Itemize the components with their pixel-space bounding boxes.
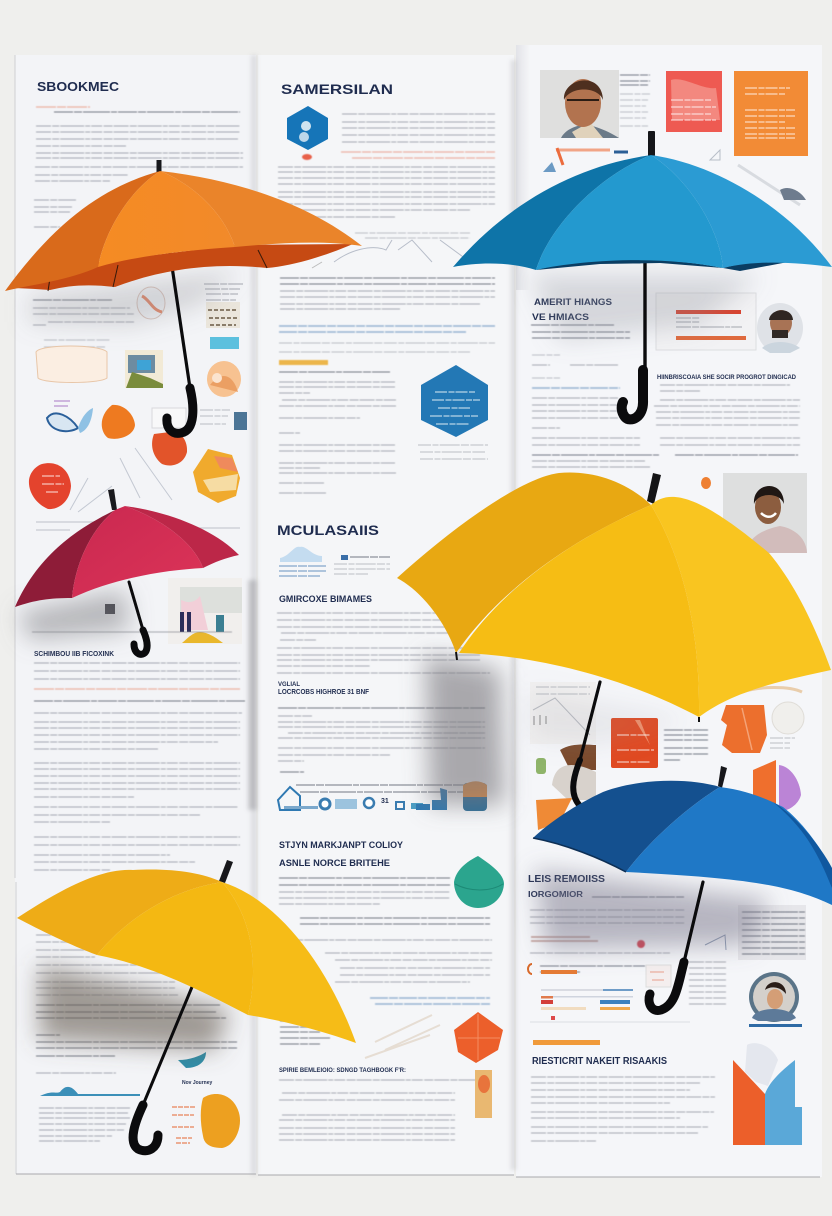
diagram: left callout box: [36, 346, 107, 382]
icon: peach circle: [207, 361, 241, 397]
icon: purple and blue device: [47, 401, 93, 433]
icon: large blue hexagon: [418, 365, 488, 459]
text block: bottom right: [531, 1077, 715, 1141]
heading: VGLIAL: VGLIAL: [278, 682, 300, 688]
heading: middle top: SAMERSILAN: [281, 82, 393, 97]
text block: side column: [689, 962, 726, 1004]
text block: beside portrait: [620, 75, 650, 126]
icon: orange sketch circle: [137, 287, 165, 319]
text block: right upper: [531, 325, 800, 467]
icon: red blob: [152, 432, 187, 466]
chart: horizontal bars: [528, 964, 690, 1022]
heading: AMERIT HIANGS: AMERIT HIANGS: [534, 297, 612, 308]
document: dark list: [738, 905, 806, 960]
blue shaft and hook: [622, 258, 645, 419]
portrait: smiling man: [723, 473, 807, 553]
blue ferrule: [648, 131, 655, 156]
text block: middle lower: [277, 613, 490, 772]
text block: left mid: [32, 632, 245, 870]
icon: yellow gem: [193, 449, 240, 503]
icon: small orange lock: [701, 477, 711, 489]
box: red bar card: [656, 293, 756, 350]
chart: pale blue graphic: [279, 547, 390, 576]
label bar: [533, 1040, 600, 1045]
heading: bottom right: RIESTICRIT NAKEIT RISAAKIS: [532, 1055, 667, 1067]
page seam shadows: [248, 55, 516, 1175]
lower blue shaft and hook: [649, 882, 703, 1011]
sketch: pale technical lines: [365, 1015, 440, 1058]
blue canopy: [453, 155, 832, 270]
umbrella: lower left yellow: [17, 860, 356, 1151]
heading: left top: SBOOKMEC: [37, 79, 120, 94]
card: orange: [734, 71, 808, 156]
sketch lines: [36, 448, 240, 530]
yellow canopy: [397, 472, 831, 717]
orange underside: [7, 244, 353, 290]
icon: orange dome: [201, 1094, 240, 1148]
text block: bottom middle: [279, 878, 492, 1140]
icon: orange blob: [102, 405, 135, 439]
icon: orange hexagon: [454, 1012, 503, 1063]
heading: VE HMIACS: VE HMIACS: [532, 312, 589, 323]
icon: product label: [475, 1070, 492, 1118]
icons row: [278, 781, 487, 811]
small doc: [152, 408, 247, 430]
orange canopy: [5, 171, 362, 291]
portrait: woman circle: [749, 972, 802, 1027]
yellow shaft and hook: [573, 682, 600, 806]
photo tile: [125, 350, 163, 388]
umbrella: crimson: [15, 489, 239, 654]
text block: beside poster: [664, 730, 708, 760]
umbrella cast shadows: [18, 270, 770, 1050]
orange shaft and hook: [167, 253, 193, 433]
panel: right document column: [516, 45, 822, 1177]
text block: middle top: [278, 114, 495, 238]
icon: small boat: [178, 1052, 213, 1086]
sketch: faint chart: [705, 935, 726, 950]
heading: GMIRCOXE BIMAMES: GMIRCOXE BIMAMES: [279, 594, 372, 605]
icons row: 31: [381, 798, 389, 805]
umbrella: large yellow: [397, 472, 831, 806]
text block: under orange umbrella: [33, 300, 134, 374]
heading: SPIRIE: SPIRIE BEMLEIOIO: SDNGD TAGHBOGK F'R:: [279, 1067, 406, 1074]
card: red: [666, 71, 722, 132]
orange ribs: [48, 250, 267, 291]
orange ferrule: [156, 160, 162, 172]
icon: orange and blue chart shape: [733, 1043, 802, 1145]
left sheet: [15, 55, 256, 1174]
icon: orange origami head: [721, 705, 767, 753]
sketch column: [204, 284, 243, 349]
sketch box under big umbrella: [530, 682, 596, 744]
heading: MCULASAIIS: MCULASAIIS: [277, 522, 379, 538]
middle sheet: [258, 55, 514, 1175]
text block: middle centre: [279, 278, 495, 493]
icon: orange and purple shapes: [753, 760, 801, 811]
side note box: [646, 965, 671, 987]
sheet spine: [516, 45, 530, 290]
panel: middle document column: [258, 55, 514, 1175]
heading: ASNLE NORCE: ASNLE NORCE BRITEHE: [279, 858, 390, 868]
heading: LEIS REMOIISS: LEIS REMOIISS: [528, 874, 605, 885]
chart: small legend bars: [172, 1107, 195, 1143]
icon: orange card: [536, 798, 572, 830]
photo: hair and bottle: [536, 744, 596, 800]
portrait: man circle: [757, 303, 803, 353]
yellow ferrule: [647, 473, 661, 504]
crimson shaft and hook: [129, 582, 147, 654]
left yellow shaft and hook: [133, 987, 192, 1151]
heading: left mid: SCHIMBOU IIB FICOXINK: [34, 651, 114, 658]
heading: STJYN MARKJANPT: STJYN MARKJANPT COLIOY: [279, 840, 404, 851]
heading: right subhead: HIINBRISCOAIA SHE SOCIR PROGROT DINGICAD: [657, 374, 796, 381]
sketch: small arrow shapes: [543, 148, 806, 205]
icon: red hex blob: [29, 463, 71, 509]
crimson ferrule: [108, 489, 117, 510]
text block: right heading body: [654, 385, 800, 425]
panel: left document column: [15, 55, 256, 1174]
heading: IORGOMIOR: IORGOMIOR: [528, 890, 583, 899]
heading: LOCRCOBS: LOCRCOBS HIGHROE 31 BNF: [278, 689, 370, 696]
icon: pale stamp: [742, 688, 804, 748]
card: red poster: [611, 718, 658, 768]
text block: left lower: [36, 935, 237, 1141]
lower blue ferrule: [718, 766, 727, 788]
left yellow ferrule: [219, 860, 233, 883]
icon: small boat: Nov Journey: [182, 1080, 213, 1086]
photo collage under red umbrella: [105, 578, 242, 644]
yellow rib tips: [456, 652, 699, 722]
umbrella: orange: [5, 160, 362, 433]
blue underside: [536, 260, 788, 271]
umbrella: blue: [453, 131, 832, 419]
left yellow canopy: [17, 870, 356, 1043]
sketch: technical drawing: [312, 240, 470, 268]
icon: teal circle: [454, 856, 504, 908]
portrait: man with glasses: [540, 70, 619, 138]
lower blue canopy: [533, 781, 832, 905]
right sheet: [516, 45, 822, 1177]
text block: left top: [34, 107, 243, 227]
icon: blue wave: [40, 1087, 140, 1096]
lower blue rim: [533, 838, 626, 872]
umbrella: lower blue: [533, 766, 832, 1011]
icon: blue hexagon: [287, 106, 328, 150]
text block: right lower: [530, 897, 685, 972]
crimson canopy: [15, 506, 239, 607]
